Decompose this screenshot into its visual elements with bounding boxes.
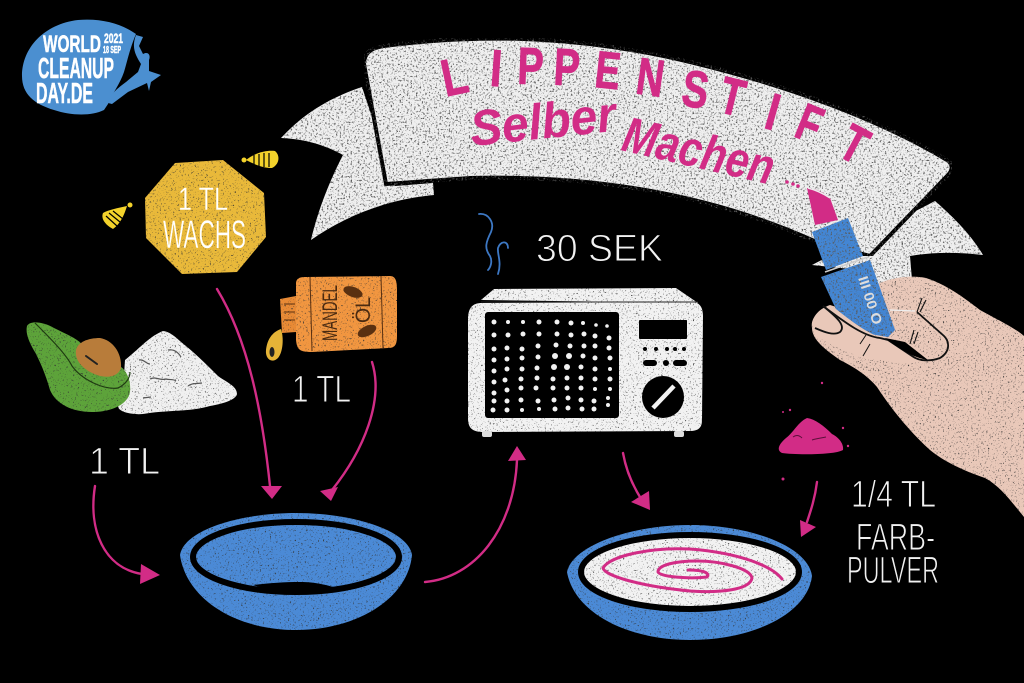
microwave door (485, 312, 619, 418)
oil drop (266, 329, 283, 361)
icon: microwave (468, 288, 703, 437)
microwave door dots (490, 320, 612, 412)
logo: World Cleanup Day: DAY.DE (36, 78, 93, 110)
ribbon right tail (812, 201, 983, 285)
lipstick (807, 188, 895, 337)
icon: empty bowl (180, 513, 412, 630)
icon: wax octagon: WACHS (163, 213, 246, 257)
lipstick: III 00 O (855, 274, 886, 327)
title: Lippenstift: P (552, 37, 581, 97)
icon: hand holding lipstick (807, 188, 1024, 517)
icon: mixed bowl with swirl (567, 525, 812, 640)
title: Lippenstift: I (759, 82, 787, 141)
title: Lippenstift: I (488, 38, 504, 97)
thumb (812, 307, 934, 363)
logo: World Cleanup Day: CLEANUP (38, 53, 114, 85)
label: avocado 1 TL: 1 TL (89, 441, 160, 483)
logo: World Cleanup Day (22, 20, 161, 114)
label: 1/4 TL colour powder: FARB- (856, 517, 935, 559)
icon: steam (479, 214, 508, 274)
title: Lippenstift: T (830, 112, 879, 176)
microwave display and buttons (639, 320, 687, 366)
label: 1/4 TL colour powder (847, 474, 939, 592)
icon: avocado (27, 322, 130, 412)
icon: wax octagon (145, 160, 266, 274)
arrow: pigment to mixed bowl (800, 482, 817, 537)
title: Lippenstift: E (592, 40, 623, 101)
title: Lippenstift: T (714, 65, 751, 128)
arrow: avocado to bowl (93, 486, 160, 584)
pink swirl (603, 549, 782, 592)
title: Lippenstift: F (788, 92, 831, 155)
icon: wax octagon: 1 TL (178, 181, 228, 217)
ribbon main band (364, 39, 952, 256)
icon: almond oil bottle (266, 276, 397, 361)
logo: World Cleanup Day: 2021 (104, 30, 123, 46)
avocado pit (76, 338, 121, 377)
label: oil 1 TL: 1 TL (292, 369, 351, 411)
icon: flour pile (118, 331, 237, 414)
hand base (812, 277, 1024, 517)
arrow: microwave to mixed bowl (623, 453, 650, 510)
ribbon left tail (281, 87, 434, 240)
icon: bee right (242, 151, 278, 168)
icon: bee left (102, 202, 132, 229)
subtitle: selber machen (467, 86, 800, 195)
logo: World Cleanup Day: WORLD (43, 31, 101, 58)
subtitle: selber machen: Selber (467, 86, 621, 157)
icon: almond oil bottle: MANDEL (319, 285, 342, 341)
label: 1/4 TL colour powder: 1/4 TL (851, 474, 936, 516)
icon: almond oil bottle: ÖL (352, 297, 375, 323)
climbing figure (108, 35, 161, 104)
microwave dial (642, 376, 684, 418)
title: Lippenstift: P (517, 36, 545, 96)
subtitle: selber machen: Machen (618, 106, 780, 195)
arrow: wax to bowl (217, 289, 282, 499)
icon: pigment powder pile (779, 382, 849, 480)
label: 1/4 TL colour powder: PULVER (847, 550, 939, 592)
arrow: oil to bowl (320, 362, 376, 501)
arrow: bowl to microwave (425, 446, 526, 582)
label: 30 sec: 30 SEK (536, 228, 663, 270)
title: Lippenstift: S (679, 58, 712, 120)
title: Lippenstift: N (633, 47, 668, 108)
ribbon banner with title (281, 36, 983, 285)
logo: World Cleanup Day: 18 SEP (103, 45, 121, 56)
title: Lippenstift (436, 36, 879, 176)
title: Lippenstift: L (436, 45, 473, 107)
